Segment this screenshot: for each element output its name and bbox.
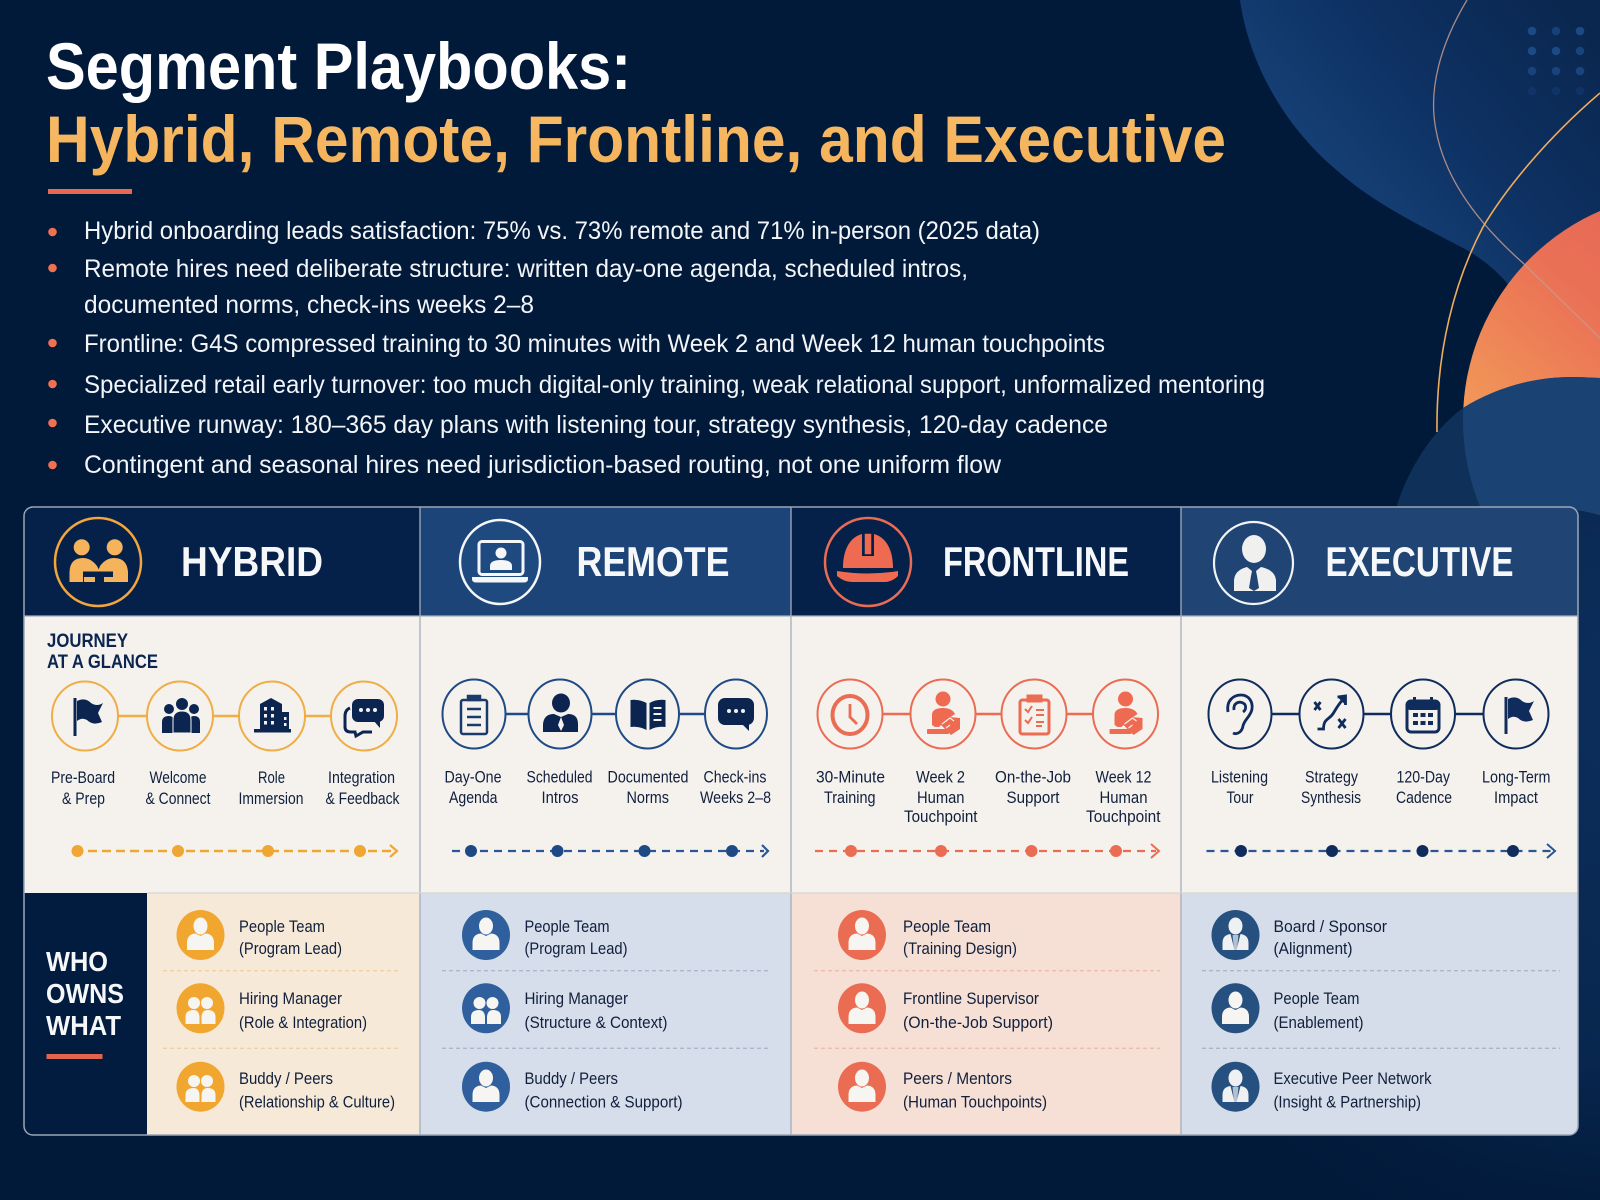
bullet list [48, 217, 1265, 479]
step: check-ins [700, 680, 771, 807]
owner: hiring manager [462, 983, 668, 1033]
executive journey [1181, 616, 1578, 893]
step: day-one agenda: Agenda [449, 789, 498, 807]
owner: executive peer network: (Insight & Partnership) [1274, 1094, 1421, 1112]
step: pre-board: & Prep [62, 790, 105, 808]
remote journey [420, 616, 791, 893]
step: check-ins: Check-ins [704, 768, 766, 786]
bullet list: Frontline: G4S compressed training to 30 minutes with Week 2 and Week 12 human touchpoints [84, 330, 1105, 358]
icon: two people at table [70, 539, 128, 582]
step: role immersion: Immersion [238, 790, 304, 808]
bullet list: Executive runway: 180–365 day plans with listening tour, strategy synthesis, 120-day cadence [84, 411, 1108, 439]
step: on-the-job support: Support [1006, 789, 1060, 807]
step: day-one agenda: Day-One [444, 768, 502, 786]
dot grid [1528, 27, 1584, 95]
step: long-term impact [1482, 680, 1550, 807]
orange circle [1463, 211, 1600, 515]
owner: people team: People Team [1274, 990, 1360, 1008]
owner: people team: (Program Lead) [239, 940, 342, 958]
title underline [48, 189, 132, 194]
owner: buddy: (Connection & Support) [524, 1094, 682, 1112]
step: 120-day cadence: Cadence [1396, 789, 1452, 807]
icon: laptop [472, 542, 528, 582]
step: welcome [146, 682, 213, 808]
bullet list: Contingent and seasonal hires need jurisdiction-based routing, not one uniform flow [84, 451, 1002, 479]
panel: hybrid [24, 507, 420, 1135]
owner: people team [462, 910, 628, 960]
step: integration: & Feedback [326, 790, 400, 808]
thin coral arc [1434, 0, 1600, 338]
title: Hybrid, Remote, Frontline, and Executive [46, 102, 1226, 176]
step: 120-day cadence: 120-Day [1396, 768, 1451, 786]
owner: frontline supervisor: (On-the-Job Support) [903, 1014, 1053, 1032]
step: scheduled intros [526, 680, 592, 807]
title: Segment Playbooks: [46, 29, 631, 103]
journey label: JOURNEY [47, 631, 128, 652]
step: week 12: Human [1100, 789, 1148, 807]
icon: executive [1234, 535, 1276, 591]
step: listening tour [1208, 680, 1272, 807]
panel: executive [1181, 507, 1578, 1135]
step: week 2: Week 2 [916, 768, 965, 786]
hybrid header: HYBRID [181, 538, 323, 585]
owner: people team: People Team [524, 918, 610, 936]
owner: hiring manager [176, 983, 367, 1033]
bullet list: Specialized retail early turnover: too much digital-only training, weak relational support, unformalized mentoring [84, 371, 1265, 399]
owner: board sponsor [1212, 910, 1387, 960]
hybrid owners [147, 893, 420, 1135]
owner: buddy [462, 1062, 682, 1112]
owner: buddy: Buddy / Peers [524, 1070, 618, 1088]
bullet list: Remote hires need deliberate structure: written day-one agenda, scheduled intros, [84, 255, 968, 283]
step: on-the-job support: On-the-Job [995, 768, 1071, 786]
step: integration [326, 682, 400, 808]
step: documented norms [608, 680, 688, 807]
lower blue overlap [1463, 377, 1600, 515]
step: documented norms: Documented [608, 768, 688, 786]
step: strategy synthesis: Synthesis [1301, 789, 1361, 807]
remote header [420, 507, 791, 616]
title [46, 29, 1226, 176]
step: welcome: Welcome [150, 769, 206, 787]
bullet list: documented norms, check-ins weeks 2–8 [84, 291, 534, 319]
owner: people team [176, 910, 342, 960]
executive header: EXECUTIVE [1326, 538, 1514, 585]
owner: peers mentors: Peers / Mentors [903, 1070, 1012, 1088]
step: week 12: Touchpoint [1086, 808, 1161, 826]
hybrid journey [24, 616, 420, 893]
who owns what label: WHO [46, 946, 108, 977]
frontline journey [791, 616, 1181, 893]
step: listening tour: Tour [1226, 789, 1254, 807]
step: listening tour: Listening [1211, 768, 1268, 786]
hybrid header [24, 507, 420, 616]
step: check-ins: Weeks 2–8 [700, 789, 771, 807]
step: 120-day cadence [1391, 680, 1455, 807]
frontline header [791, 507, 1181, 616]
owner: buddy [176, 1062, 395, 1112]
step: week 2 [904, 680, 978, 826]
who owns what label: WHAT [46, 1010, 121, 1041]
timeline: frontline [815, 844, 1159, 858]
journey label: AT A GLANCE [47, 652, 158, 673]
step: pre-board: Pre-Board [51, 769, 115, 787]
lower blue shape [1395, 377, 1600, 520]
step: week 2: Human [917, 789, 964, 807]
owner: board sponsor: (Alignment) [1274, 940, 1352, 958]
step: scheduled intros: Intros [542, 789, 578, 807]
remote header: REMOTE [576, 538, 730, 585]
decorative corner shapes [1240, 0, 1600, 515]
panel: remote [420, 507, 791, 1135]
owner: peers mentors [838, 1062, 1047, 1112]
owner: people team: (Program Lead) [524, 940, 628, 958]
owner: people team: People Team [903, 918, 991, 936]
step: week 12: Week 12 [1096, 768, 1152, 786]
timeline: hybrid [72, 845, 397, 857]
step: scheduled intros: Scheduled [526, 768, 592, 786]
owner: peers mentors: (Human Touchpoints) [903, 1094, 1047, 1112]
frontline header: FRONTLINE [943, 538, 1129, 585]
shape: blue blob [1240, 0, 1600, 300]
owner: hiring manager: Hiring Manager [239, 990, 342, 1008]
step: integration: Integration [328, 769, 395, 787]
step: documented norms: Norms [626, 789, 669, 807]
step: 30-minute training: 30-Minute [816, 768, 885, 786]
owner: board sponsor: Board / Sponsor [1274, 918, 1387, 936]
step: on-the-job support [995, 680, 1071, 807]
step: long-term impact: Long-Term [1482, 768, 1550, 786]
step: 30-minute training [816, 680, 885, 807]
step: strategy synthesis [1300, 680, 1364, 807]
bullet list: Hybrid onboarding leads satisfaction: 75% vs. 73% remote and 71% in-person (2025 data) [84, 217, 1040, 245]
owner: frontline supervisor [838, 983, 1053, 1033]
executive header [1181, 507, 1578, 616]
step: role immersion [238, 682, 305, 808]
step: day-one agenda [442, 680, 506, 807]
owner: hiring manager: (Structure & Context) [524, 1014, 668, 1032]
panel: frontline [791, 507, 1181, 1135]
timeline: remote [452, 845, 768, 857]
icon: hard hat [837, 533, 898, 582]
step: 30-minute training: Training [824, 789, 876, 807]
step: strategy synthesis: Strategy [1305, 768, 1359, 786]
step: week 12 [1086, 680, 1161, 826]
owner: people team [838, 910, 1017, 960]
remote owners [420, 893, 791, 1135]
owner: executive peer network [1212, 1062, 1432, 1112]
journey label [47, 634, 158, 668]
owner: people team: (Enablement) [1274, 1014, 1364, 1032]
owner: executive peer network: Executive Peer Network [1274, 1070, 1432, 1088]
timeline: executive [1206, 844, 1555, 858]
owner: people team: People Team [239, 918, 325, 936]
step: long-term impact: Impact [1494, 789, 1538, 807]
step: week 2: Touchpoint [904, 808, 978, 826]
owner: hiring manager: Hiring Manager [524, 990, 628, 1008]
who owns what label: OWNS [46, 978, 124, 1009]
who owns what label [46, 952, 123, 1059]
owner: people team: (Training Design) [903, 940, 1017, 958]
owner: hiring manager: (Role & Integration) [239, 1014, 367, 1032]
owner: people team [1212, 983, 1364, 1033]
owner: buddy: (Relationship & Culture) [239, 1094, 395, 1112]
step: pre-board [51, 682, 118, 808]
step: welcome: & Connect [146, 790, 211, 808]
owner: frontline supervisor: Frontline Supervisor [903, 990, 1039, 1008]
step: role immersion: Role [258, 769, 285, 787]
owner: buddy: Buddy / Peers [239, 1070, 333, 1088]
thin gold arc [1437, 93, 1600, 432]
executive owners [1181, 893, 1578, 1135]
frontline owners [791, 893, 1181, 1135]
segment table [24, 507, 1578, 1135]
